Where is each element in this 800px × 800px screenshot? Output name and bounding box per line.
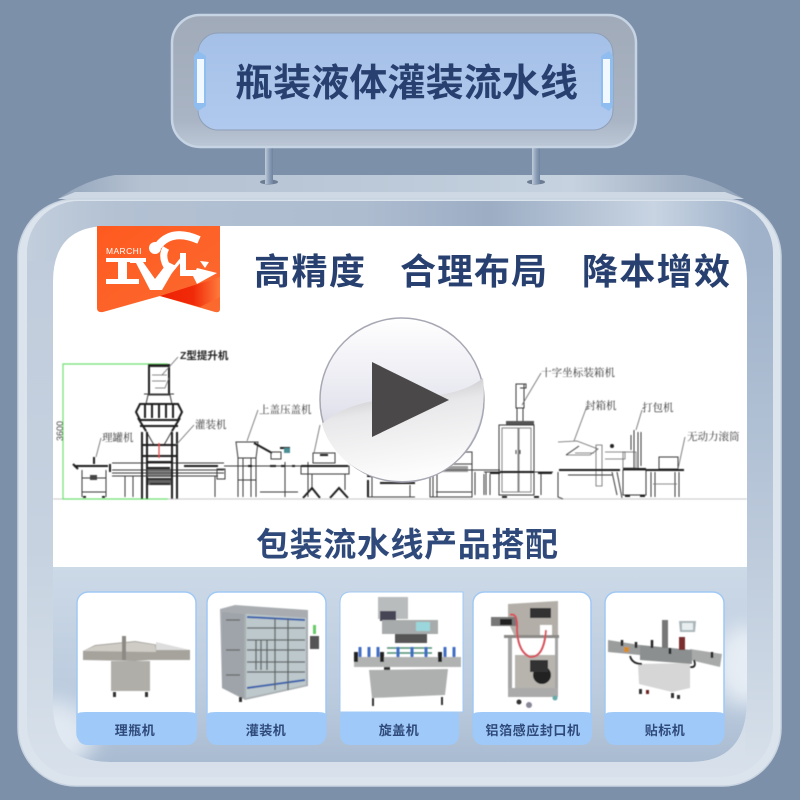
diagram labels bbox=[55, 349, 740, 444]
right light bbox=[601, 51, 613, 111]
cap feeder bbox=[236, 442, 308, 497]
logo bbox=[97, 226, 220, 312]
slogan 2: 合理布局 bbox=[400, 251, 547, 292]
title sign bbox=[172, 15, 636, 147]
roller conveyor bbox=[646, 457, 684, 497]
sign posts bbox=[260, 147, 545, 184]
diagram labels: 打包机 bbox=[642, 401, 674, 414]
sign plate bbox=[198, 33, 613, 130]
play triangle bbox=[372, 362, 449, 437]
card label: 铝箔感应封口机 bbox=[486, 723, 580, 738]
diagram labels: 灌装机 bbox=[195, 418, 227, 431]
logo badge bbox=[97, 226, 220, 312]
case machine hidden bbox=[367, 452, 500, 497]
product card: 旋盖机 bbox=[340, 592, 463, 745]
play gloss bbox=[322, 378, 484, 481]
machine image: induction sealer bbox=[491, 601, 559, 708]
conveyor 1 bbox=[110, 463, 345, 497]
play button bbox=[320, 318, 484, 482]
product card: 贴标机 bbox=[605, 592, 724, 745]
frame ring bbox=[18, 199, 781, 786]
diagram labels: 3600 bbox=[55, 421, 65, 441]
diagram labels: Z型提升机 bbox=[180, 349, 229, 362]
card label: 灌装机 bbox=[246, 723, 286, 738]
diagram labels: 封箱机 bbox=[585, 399, 617, 412]
card label bbox=[340, 712, 459, 745]
diagram labels: 理罐机 bbox=[102, 431, 134, 444]
section heading: 包装流水线产品搭配 bbox=[256, 526, 558, 563]
card label bbox=[605, 712, 724, 745]
product card: 灌装机 bbox=[207, 592, 326, 745]
sealer bbox=[301, 453, 349, 498]
logo mark: MARCHI bbox=[106, 246, 142, 256]
card label bbox=[473, 712, 592, 745]
lower product panel bbox=[53, 567, 747, 762]
left light bbox=[194, 51, 206, 111]
card label: 理瓶机 bbox=[115, 723, 155, 738]
slogan 3: 降本增效 bbox=[582, 251, 730, 292]
white screen bbox=[53, 226, 747, 762]
cartoner bbox=[484, 384, 553, 497]
machine image: labeling machine bbox=[608, 620, 722, 699]
production line diagram bbox=[53, 349, 747, 499]
diagram labels: 十字坐标装箱机 bbox=[541, 366, 616, 379]
frame back band bbox=[58, 175, 744, 199]
logo fold bbox=[160, 277, 220, 307]
strapping machine bbox=[623, 430, 646, 496]
diagram labels: 上盖压盖机 bbox=[259, 403, 312, 416]
main frame bbox=[18, 175, 781, 786]
elevator and filler tower bbox=[136, 364, 182, 499]
machine image: capping machine bbox=[354, 597, 461, 706]
product card: 理瓶机 bbox=[77, 592, 197, 745]
diagram labels: 无动力滚筒 bbox=[687, 430, 740, 443]
diagram leader lines bbox=[96, 357, 685, 469]
height guide bbox=[63, 364, 168, 499]
title: 瓶装液体灌装流水线 bbox=[235, 63, 578, 105]
card label: 贴标机 bbox=[645, 723, 685, 738]
machine image: filling machine bbox=[220, 605, 319, 702]
product card: 铝箔感应封口机 bbox=[473, 592, 592, 745]
card label bbox=[77, 712, 197, 745]
slogans bbox=[254, 251, 730, 292]
sign outer frame bbox=[172, 15, 636, 147]
card label: 旋盖机 bbox=[379, 723, 419, 738]
frame inner bbox=[27, 201, 773, 777]
case sealer bbox=[558, 441, 625, 499]
slogan 1: 高精度 bbox=[254, 251, 365, 292]
machine image: bottle unscrambler bbox=[83, 636, 190, 697]
ground line bbox=[53, 498, 747, 500]
card label bbox=[207, 712, 326, 745]
unscrambler bbox=[73, 457, 108, 497]
